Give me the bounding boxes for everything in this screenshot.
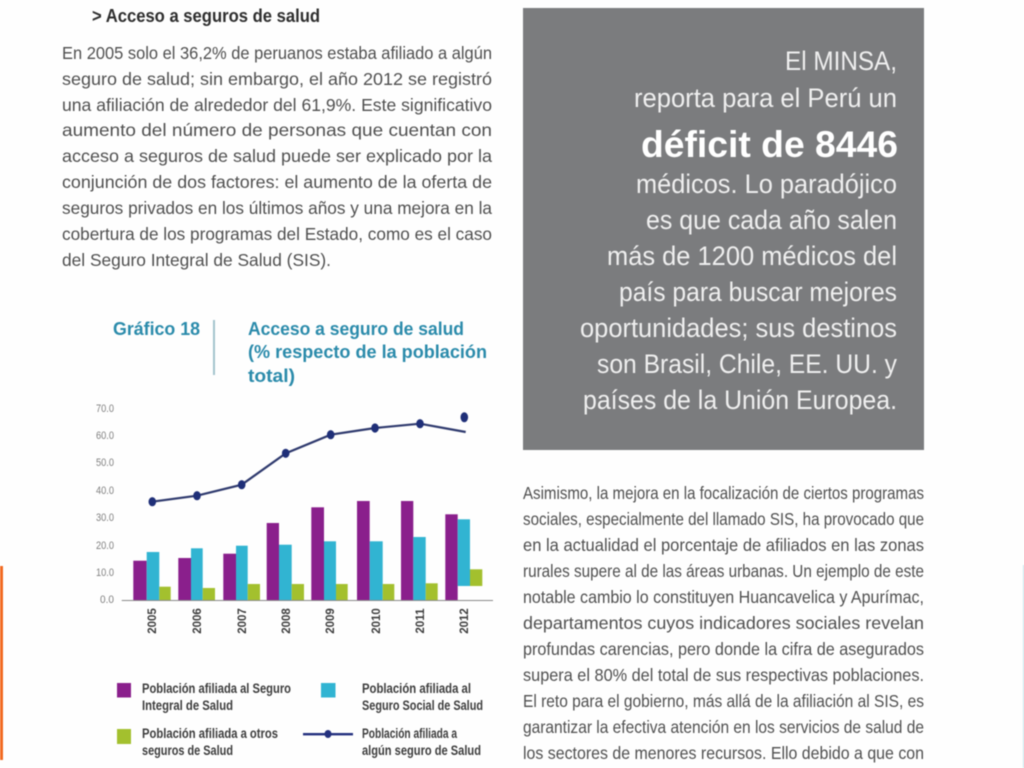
chart title (248, 318, 487, 386)
legend item: otros seguros: Población afiliada a otros (142, 726, 278, 741)
orange side bar (0, 566, 3, 760)
text block: intro paragraph (62, 43, 492, 270)
legend item: otros seguros: seguros de Salud (142, 743, 233, 758)
y axis labels: 30.0 (96, 512, 114, 524)
text block: intro paragraph: conjunción de dos factores: el aumento de la oferta de (62, 172, 492, 192)
text block: intro paragraph: En 2005 solo el 36,2% de peruanos estaba afiliado a algún (62, 43, 492, 63)
callout panel: déficit de médicos: países de la Unión Europea. (583, 385, 897, 415)
x axis years: 2008 (281, 608, 293, 634)
y axis labels: 0.0 (100, 594, 114, 606)
chart title: Acceso a seguro de salud (248, 318, 464, 339)
x axis years: 2012 (459, 608, 471, 634)
text block: focalización del SIS: rurales supere al de las áreas urbanas. Un ejemplo de este (523, 561, 924, 581)
y axis labels: 50.0 (96, 457, 114, 469)
legend item: algún seguro (303, 726, 481, 758)
x axis years: 2006 (192, 608, 204, 634)
text block: focalización del SIS: sociales, especialmente del llamado SIS, ha provocado que (523, 509, 924, 529)
legend (117, 681, 483, 758)
callout panel: déficit de médicos: país para buscar mejores (619, 277, 897, 307)
callout panel: déficit de médicos: es que cada año salen (646, 205, 897, 235)
callout panel: déficit de médicos: déficit de 8446 (641, 124, 898, 165)
x axis years: 2009 (325, 608, 337, 634)
callout panel: déficit de médicos: más de 1200 médicos del (607, 241, 897, 271)
text block: intro paragraph: acceso a seguros de salud puede ser explicado por la (62, 146, 492, 166)
y axis labels: 20.0 (96, 540, 114, 552)
text block: focalización del SIS (523, 483, 924, 763)
legend item: seguro integral (117, 681, 291, 713)
callout panel: déficit de médicos: médicos. Lo paradójico (636, 169, 897, 199)
text block: intro paragraph: seguro de salud; sin embargo, el año 2012 se registró (62, 69, 492, 89)
callout panel: déficit de médicos: El MINSA, (785, 46, 897, 76)
text block: focalización del SIS: Asimismo, la mejora en la focalización de ciertos programas (523, 483, 924, 503)
text block: intro paragraph: seguros privados en los últimos años y una mejora en la (62, 198, 492, 218)
y axis labels: 60.0 (96, 430, 114, 442)
text block: focalización del SIS: notable cambio lo constituyen Huancavelica y Apurímac, (523, 587, 924, 607)
text block: intro paragraph: del Seguro Integral de Salud (SIS). (62, 250, 331, 270)
text block: intro paragraph: una afiliación de alrededor del 61,9%. Este significativo (62, 95, 492, 115)
chart: acceso a seguro de salud (96, 403, 493, 634)
chart title: total) (248, 365, 295, 386)
chart label: gráfico 18: Gráfico 18 (113, 318, 200, 339)
legend item: seguro social: Población afiliada al (362, 681, 471, 696)
x axis years: 2010 (371, 608, 383, 634)
text block: focalización del SIS: departamentos cuyos indicadores sociales revelan (523, 613, 924, 633)
x axis years: 2007 (237, 608, 249, 634)
bars: población afiliada a otros seguros (159, 569, 482, 600)
y axis labels: 40.0 (96, 485, 114, 497)
callout panel: déficit de médicos (523, 8, 924, 450)
bars: población afiliada al SIS (133, 501, 458, 600)
bars: población afiliada al seguro social (147, 519, 470, 600)
legend item: seguro social (321, 681, 483, 713)
line series: población afiliada a algún seguro (148, 412, 468, 506)
text block: focalización del SIS: garantizar la efectiva atención en los servicios de salud de (523, 717, 924, 737)
text block: focalización del SIS: profundas carencias, pero donde la cifra de asegurados (523, 639, 924, 659)
x axis years (147, 608, 471, 634)
right side accent line (1023, 565, 1024, 768)
text block: focalización del SIS: en la actualidad el porcentaje de afiliados en las zonas (523, 535, 924, 555)
text block: focalización del SIS: El reto para el gobierno, más allá de la afiliación al SIS, es (523, 691, 924, 711)
text block: focalización del SIS: supera el 80% del total de sus respectivas poblaciones. (523, 665, 924, 685)
legend item: seguro social: Seguro Social de Salud (362, 698, 483, 713)
text block: intro paragraph: cobertura de los programas del Estado, como es el caso (62, 224, 492, 244)
y axis labels: 10.0 (96, 567, 114, 579)
callout panel: déficit de médicos: oportunidades; sus destinos (580, 313, 897, 343)
heading: acceso a seguros de salud: > Acceso a seguros de salud (92, 6, 320, 26)
legend item: seguro integral: Población afiliada al Seguro (142, 681, 291, 696)
callout panel: déficit de médicos: reporta para el Perú un (634, 83, 897, 113)
legend item: seguro integral: Integral de Salud (142, 698, 233, 713)
chart title: (% respecto de la población (248, 341, 487, 362)
x axis years: 2005 (147, 608, 159, 634)
text block: intro paragraph: aumento del número de personas que cuentan con (62, 120, 492, 140)
legend item: algún seguro: Población afiliada a (362, 726, 457, 741)
x axis years: 2011 (415, 608, 427, 633)
legend item: algún seguro: algún seguro de Salud (362, 743, 481, 758)
y axis labels (96, 403, 114, 606)
legend item: otros seguros (117, 726, 278, 758)
y axis labels: 70.0 (96, 403, 114, 415)
callout panel: déficit de médicos: son Brasil, Chile, EE. UU. y (597, 349, 897, 379)
text block: focalización del SIS: los sectores de menores recursos. Ello debido a que con (523, 743, 924, 763)
